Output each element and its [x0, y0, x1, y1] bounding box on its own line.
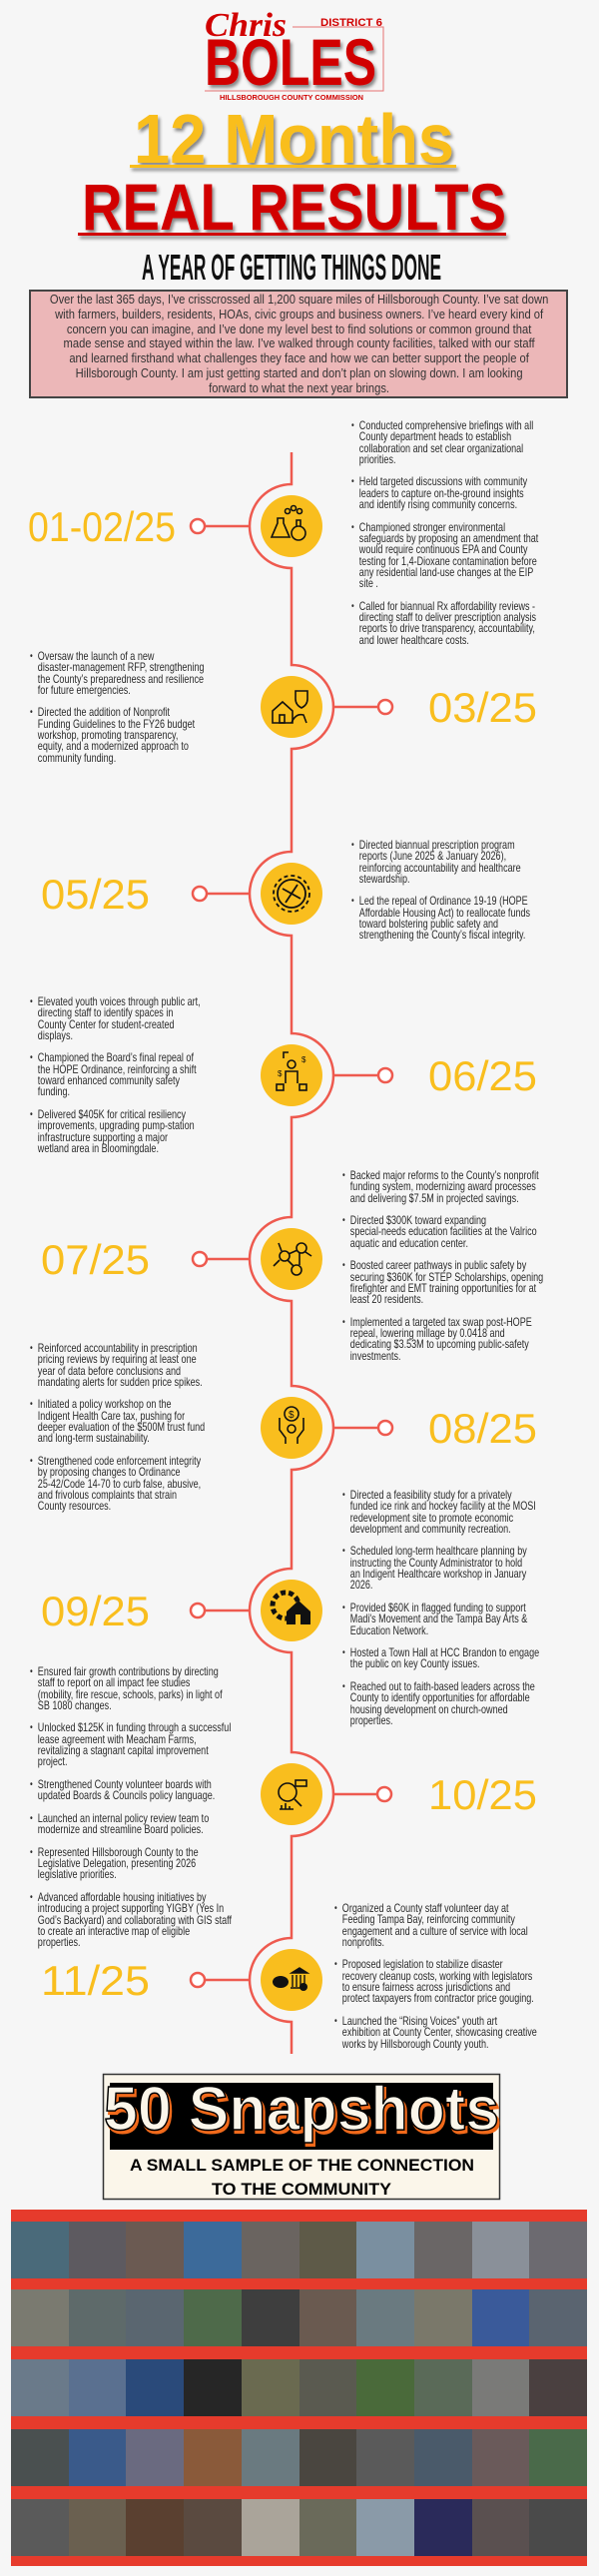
text block: 07/25: [342, 1169, 543, 1363]
text block: 08/25: Reinforced accountability in prescription: [38, 1342, 198, 1355]
node 10/25: [261, 1763, 537, 1825]
text block: 07/25: Implemented a targeted tax swap post-HOPE: [350, 1316, 532, 1329]
text block: 03/25: for future emergencies.: [38, 684, 131, 697]
text block: 11/25: Organized a County staff volunteer day at: [342, 1902, 509, 1915]
text block: 01-02/25: priorities.: [359, 453, 395, 466]
text block: 05/25: Led the repeal of Ordinance 19-19 (HOPE: [359, 895, 528, 908]
text block: 05/25: toward bolstering public safety and: [359, 918, 498, 931]
text block: 09/25: the public on key County issues.: [350, 1657, 479, 1670]
text block: 09/25: Scheduled long-term healthcare planning by: [350, 1545, 527, 1558]
text block: 05/25: Directed biannual prescription program: [359, 839, 515, 852]
text block: 08/25: Strengthened code enforcement integrity: [38, 1455, 201, 1468]
text block: 05/25: reinforcing accountability and healthcare: [359, 862, 521, 875]
node 03/25: 03/25: [428, 684, 537, 731]
snapshots heading: 50 Snapshots: [104, 2075, 499, 2144]
text block: 11/25: Feeding Tampa Bay, reinforcing community: [342, 1913, 515, 1926]
node 07/25: 07/25: [41, 1236, 150, 1283]
text block: 08/25: County resources.: [38, 1500, 111, 1513]
text block: 09/25: Provided $60K in flagged funding to support: [350, 1602, 526, 1614]
text block: 08/25: Initiated a policy workshop on the: [38, 1398, 172, 1411]
text block: 10/25: to create an interactive map of eligible: [38, 1925, 190, 1938]
text block: 10/25: staff to report on all impact fee studies: [38, 1676, 190, 1689]
text block: 03/25: workshop, promoting transparency,: [38, 729, 178, 742]
text block: 07/25: aquatic and education center.: [350, 1237, 468, 1250]
text block: 01-02/25: any residential land-use changes at the EIP: [359, 566, 533, 579]
text block: 07/25: least 20 residents.: [350, 1293, 423, 1306]
intro text box: concern you can imagine, and I’ve done my level best to find solutions or common ground that: [67, 322, 531, 336]
text block: 07/25: dedicating $3.53M to upcoming public-safety: [350, 1338, 529, 1351]
text block: 07/25: Boosted career pathways in public safety by: [350, 1259, 526, 1272]
text block: 09/25: Directed a feasibility study for a privately: [350, 1489, 512, 1502]
node 09/25: 09/25: [41, 1588, 150, 1634]
text block: 07/25: funding system, modernizing award processes: [350, 1180, 536, 1193]
text block: 10/25: modernize and streamline Board policies.: [38, 1823, 204, 1836]
text block: 03/25: Funding Guidelines to the FY26 budget: [38, 718, 195, 731]
icon: house and shield: [273, 691, 307, 723]
text block: 06/25: directing staff to identify spaces in: [38, 1006, 173, 1019]
text block: 08/25: 25-42/Code 14-70 to curb false, abusive,: [38, 1478, 201, 1491]
text block: 09/25: development and community recreation.: [350, 1523, 511, 1536]
text block: 11/25: Launched the “Rising Voices” youth art: [342, 2015, 497, 2028]
text block: 03/25: equity, and a modernized approach to: [38, 740, 189, 753]
text block: 10/25: Launched an internal policy review team to: [38, 1812, 209, 1825]
node 11/25: 11/25: [41, 1957, 150, 2004]
icon: network of people: [274, 1243, 311, 1275]
text block: 01-02/25: and lower healthcare costs.: [359, 634, 469, 647]
text block: 10/25: Represented Hillsborough County to the: [38, 1846, 199, 1859]
text block: 01-02/25: County department heads to establish: [359, 430, 511, 443]
text block: 11/25: to ensure fairness across jurisdictions and: [342, 1981, 510, 1994]
snapshots heading: [102, 2073, 501, 2201]
intro text box: Hillsborough County. I am just getting started and don’t plan on slowing down. I am looking: [76, 365, 523, 380]
node 01-02/25: 01-02/25: [28, 503, 176, 550]
text block: 09/25: housing development on church-owned: [350, 1703, 508, 1716]
node 06/25: [261, 1044, 537, 1106]
text block: 09/25: 2026.: [350, 1579, 372, 1592]
icon: flasks: [272, 505, 305, 540]
text block: 08/25: Indigent Health Care tax, pushing for: [38, 1410, 185, 1423]
text block: 09/25: instructing the County Administrator to hold: [350, 1557, 522, 1570]
text block: 07/25: Directed $300K toward expanding: [350, 1214, 486, 1227]
text block: 11/25: nonprofits.: [342, 1936, 384, 1949]
text block: 09/25: [342, 1489, 539, 1727]
text block: 07/25: Backed major reforms to the County’s nonprofit: [350, 1169, 539, 1182]
text block: 01-02/25: Held targeted discussions with community: [359, 475, 527, 488]
text block: 03/25: Oversaw the launch of a new: [38, 650, 154, 663]
text block: 10/25: Legislative Delegation, presenting 2026: [38, 1857, 196, 1870]
node 05/25: 05/25: [41, 871, 150, 918]
logo: Chris Boles: BOLES: [205, 25, 376, 99]
text block: 08/25: and frivolous complaints that strain: [38, 1489, 177, 1502]
text block: 11/25: recovery cleanup costs, working with legislators: [342, 1970, 532, 1983]
text block: 08/25: mandating alerts for sudden price spikes.: [38, 1376, 203, 1389]
text block: 03/25: community funding.: [38, 752, 116, 765]
text block: 10/25: God’s Backyard) and collaborating with GIS staff: [38, 1914, 232, 1927]
text block: 01-02/25: would require continuous EPA and County: [359, 543, 528, 556]
icon: person with money and thumbs: $: [278, 1069, 283, 1078]
node 03/25: [261, 676, 537, 738]
node 01-02/25: [28, 495, 322, 557]
text block: 08/25: by proposing changes to Ordinance: [38, 1466, 181, 1479]
intro text box: with farmers, builders, residents, HOAs, civic groups and business owners. I’ve heard every kind of: [55, 307, 543, 322]
text block: 11/25: works by Hillsborough County youth.: [342, 2038, 489, 2051]
text block: 06/25: toward enhanced community safety: [38, 1074, 180, 1087]
text block: 08/25: year of data before conclusions and: [38, 1365, 181, 1378]
text block: 11/25: engagement and a culture of service with local: [342, 1925, 528, 1938]
text block: 01-02/25: reports to drive transparency, accountability,: [359, 622, 535, 635]
text block: 10/25: Unlocked $125K in funding through a successful: [38, 1721, 231, 1734]
text block: 07/25: special-needs education facilities at the Valrico: [350, 1225, 537, 1238]
node 08/25: [261, 1397, 537, 1459]
text block: 01-02/25: directing staff to deliver prescription analysis: [359, 611, 536, 624]
node 11/25: [41, 1949, 322, 2011]
intro text box: [29, 290, 568, 398]
node 07/25: [41, 1228, 322, 1290]
text block: 05/25: strengthening the County’s fiscal integrity.: [359, 929, 525, 942]
text block: 06/25: improvements, upgrading pump-station: [38, 1119, 195, 1132]
text block: 05/25: Affordable Housing Act) to reallocate funds: [359, 907, 530, 920]
icon: person with money and thumbs: $: [301, 1055, 306, 1064]
title: REAL RESULTS: REAL RESULTS: [82, 170, 506, 244]
text block: 03/25: the County’s preparedness and resilience: [38, 673, 204, 686]
intro text box: and learned firsthand what challenges they face and how we can better support the people of: [69, 350, 529, 365]
node 06/25: 06/25: [428, 1052, 537, 1099]
header: logo and titles: [78, 7, 510, 285]
text block: 06/25: Championed the Board’s final repeal of: [38, 1051, 194, 1064]
text block: 09/25: County to identify opportunities for affordable: [350, 1691, 530, 1704]
text block: 05/25: reports (June 2025 & January 2026),: [359, 850, 506, 863]
text block: 09/25: Hosted a Town Hall at HCC Brandon to engage: [350, 1646, 539, 1659]
text block: 10/25: (mobility, fire rescue, schools, parks) in light of: [38, 1688, 223, 1701]
text block: 01-02/25: collaboration and set clear organizational: [359, 442, 523, 455]
intro text box: forward to what the next year brings.: [209, 380, 389, 395]
text block: 09/25: Education Network.: [350, 1624, 428, 1637]
text block: 06/25: displays.: [38, 1029, 73, 1042]
text block: 11/25: exhibition at County Center, showcasing creative: [342, 2026, 537, 2039]
text block: 07/25: securing $360K for STEP Scholarships, opening: [350, 1271, 543, 1284]
text block: 07/25: investments.: [350, 1350, 401, 1363]
text block: 01-02/25: Called for biannual Rx affordability reviews -: [359, 600, 535, 613]
icon: person with money and thumbs: [277, 1052, 306, 1090]
text block: 01-02/25: Championed stronger environmental: [359, 521, 505, 534]
text block: 01-02/25: and identify rising community concerns.: [359, 498, 517, 511]
text block: 06/25: County Center for student-created: [38, 1018, 175, 1031]
text block: 05/25: stewardship.: [359, 873, 410, 886]
text block: 10/25: Ensured fair growth contributions by directing: [38, 1665, 219, 1678]
text block: 01-02/25: [351, 419, 539, 647]
title: 12 Months: 12 Months: [134, 100, 454, 178]
text block: 06/25: wetland area in Bloomingdale.: [38, 1142, 159, 1155]
text block: 11/25: [334, 1902, 537, 2051]
text block: 10/25: project.: [38, 1755, 67, 1768]
text block: 10/25: Strengthened County volunteer boards with: [38, 1778, 212, 1791]
logo: Chris Boles: [205, 7, 383, 102]
text block: 07/25: firefighter and EMT training opportunities for at: [350, 1282, 536, 1295]
text block: 01-02/25: leaders to capture on-the-ground insights: [359, 487, 524, 500]
icon: gear with tools: [274, 876, 309, 912]
snapshots heading: TO THE COMMUNITY: [212, 2180, 392, 2199]
text block: 08/25: deeper evaluation of the $500M trust fund: [38, 1421, 205, 1434]
text block: 01-02/25: safeguards by proposing an amendment that: [359, 532, 538, 545]
text block: 11/25: protect taxpayers from contractor price gouging.: [342, 1992, 534, 2005]
text block: 10/25: updated Boards & Councils policy language.: [38, 1789, 215, 1802]
text block: 05/25: [351, 839, 530, 942]
text block: 06/25: funding.: [38, 1085, 70, 1098]
snapshots heading: 50 Snapshots: [106, 2078, 501, 2147]
text block: 07/25: repeal, lowering millage by 0.0418 and: [350, 1327, 505, 1340]
text block: 09/25: Reached out to faith-based leaders across the: [350, 1680, 535, 1693]
text block: 10/25: revitalizing a stagnant capital improvement: [38, 1744, 209, 1757]
icon: magnifier analysis: [279, 1780, 306, 1809]
node 08/25: 08/25: [428, 1405, 537, 1452]
icon: palette and building: [273, 1968, 307, 1991]
text block: 01-02/25: Conducted comprehensive briefings with all: [359, 419, 533, 432]
text block: 06/25: infrastructure supporting a major: [38, 1131, 168, 1144]
text block: 06/25: Delivered $405K for critical resiliency: [38, 1108, 186, 1121]
logo: Chris Boles: HILLSBOROUGH COUNTY COMMISSION: [220, 93, 363, 102]
icon: gear and house: [273, 1593, 310, 1624]
snapshots heading: A SMALL SAMPLE OF THE CONNECTION: [130, 2156, 474, 2175]
node 10/25: 10/25: [428, 1771, 537, 1818]
text block: 09/25: redevelopment site to promote economic: [350, 1512, 513, 1525]
text block: 06/25: [30, 995, 201, 1155]
text block: 08/25: [30, 1342, 205, 1513]
text block: 09/25: an Indigent Healthcare workshop in January: [350, 1568, 526, 1581]
text block: 03/25: Directed the addition of Nonprofit: [38, 706, 170, 719]
text block: 09/25: properties.: [350, 1714, 393, 1727]
text block: 06/25: Elevated youth voices through public art,: [38, 995, 201, 1008]
intro text box: made sense and stayed within the law. I’ve walked through county facilities, talked with our staff: [64, 335, 535, 350]
icon: hands holding coin: [280, 1407, 303, 1444]
text block: 07/25: and delivering $7.5M in projected savings.: [350, 1192, 519, 1205]
text block: 08/25: pricing reviews by requiring at least one: [38, 1353, 197, 1366]
text block: 03/25: disaster-management RFP, strengthening: [38, 661, 205, 674]
text block: 10/25: [30, 1665, 232, 1949]
photo grid: [11, 2210, 587, 2566]
text block: 08/25: and long-term sustainability.: [38, 1432, 150, 1445]
node 09/25: [41, 1580, 322, 1641]
text block: 11/25: Proposed legislation to stabilize disaster: [342, 1958, 503, 1971]
text block: 09/25: funded ice rink and hockey facility at the MOSI: [350, 1500, 536, 1513]
icon: hands holding coin: $: [289, 1410, 295, 1421]
text block: 10/25: SB 1080 changes.: [38, 1699, 112, 1712]
text block: 09/25: Madi's Movement and the Tampa Bay Arts &: [350, 1612, 527, 1625]
logo: Chris Boles: Chris: [205, 7, 287, 44]
text block: 10/25: Advanced affordable housing initiatives by: [38, 1891, 207, 1904]
text block: 10/25: legislative priorities.: [38, 1868, 117, 1881]
text block: 01-02/25: testing for 1,4-Dioxane contamination before: [359, 555, 537, 568]
text block: 10/25: lease agreement with Meacham Farms,: [38, 1733, 197, 1746]
intro text box: Over the last 365 days, I’ve crisscrossed all 1,200 square miles of Hillsborough County. I’ve sat down: [50, 292, 548, 307]
text block: 10/25: properties.: [38, 1936, 81, 1949]
text block: 03/25: [30, 650, 205, 765]
text block: 01-02/25: site .: [359, 577, 378, 590]
logo: Chris Boles: DISTRICT 6: [320, 17, 382, 29]
text block: 10/25: introducing a project supporting YIGBY (Yes In: [38, 1902, 224, 1915]
text block: 06/25: the HOPE Ordinance, reinforcing a shift: [38, 1063, 197, 1076]
node 05/25: [41, 863, 322, 925]
